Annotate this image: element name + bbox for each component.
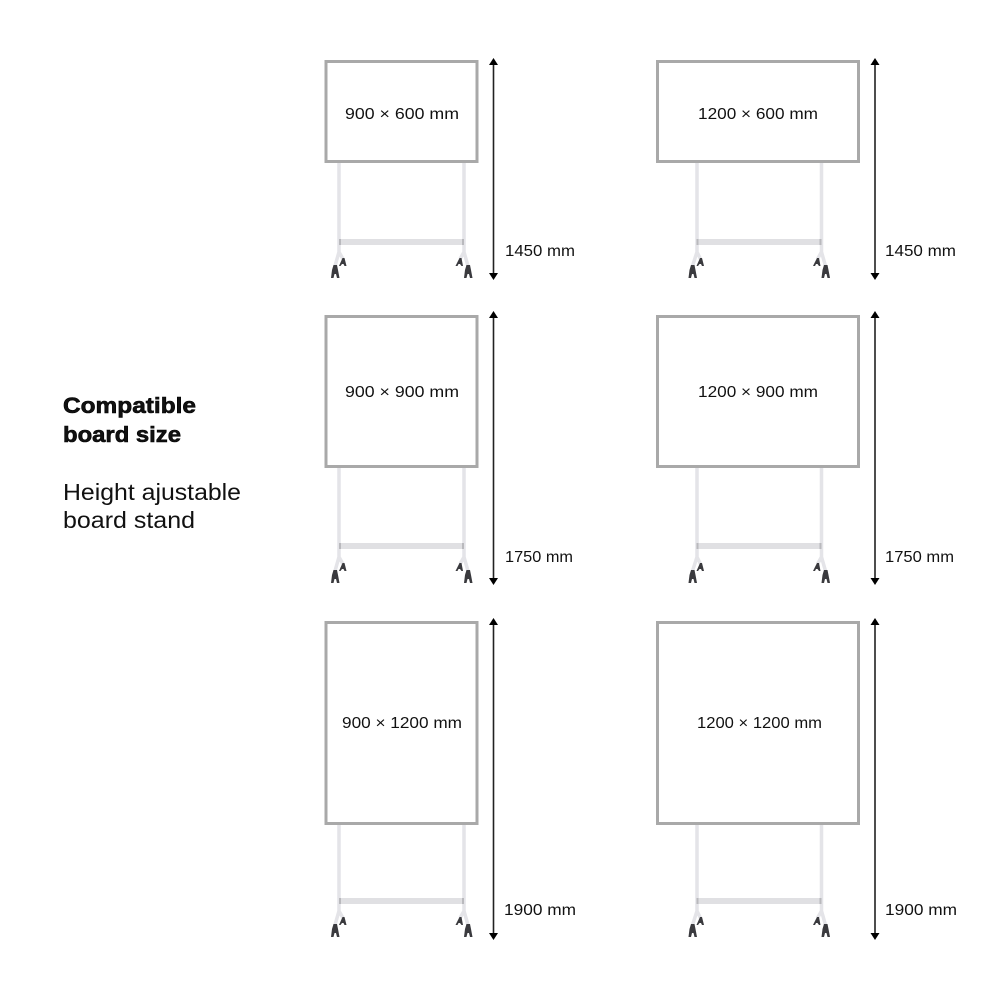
text block: height adjustable stand: Height ajustable <box>63 479 241 505</box>
stand: 900 x 600 <box>331 162 472 278</box>
arrow: 1750 mm height <box>870 311 954 585</box>
stand: 1200 x 600 <box>688 162 830 278</box>
board: 900 x 900: 900 × 900 mm <box>345 384 459 401</box>
arrow: 1750 mm height: 1750 mm <box>885 549 954 566</box>
arrow: 1450 mm height <box>489 58 575 280</box>
board: 1200 x 1200: 1200 × 1200 mm <box>697 715 822 732</box>
heading: compatible board size: board size <box>63 422 181 447</box>
stand: 900 x 900 <box>331 467 472 583</box>
board: 1200 x 600: 1200 × 600 mm <box>698 106 818 123</box>
text block: height adjustable stand: board stand <box>63 507 195 533</box>
board: 1200 x 900: 1200 × 900 mm <box>698 384 818 401</box>
arrow: 1450 mm height <box>870 58 956 280</box>
board: 900 x 600: 900 × 600 mm <box>345 106 459 123</box>
arrow: 1750 mm height <box>489 311 573 585</box>
stand: 1200 x 1200 <box>688 824 830 937</box>
arrow: 1900 mm height: 1900 mm <box>885 902 957 919</box>
board: 900 x 900 <box>326 316 477 466</box>
stand: 1200 x 900 <box>688 467 830 583</box>
arrow: 1900 mm height <box>870 618 957 940</box>
board: 900 x 600 <box>326 62 477 162</box>
arrow: 1900 mm height <box>489 618 576 940</box>
board: 900 x 1200: 900 × 1200 mm <box>342 715 462 732</box>
arrow: 1450 mm height: 1450 mm <box>505 243 575 260</box>
arrow: 1450 mm height: 1450 mm <box>885 243 956 260</box>
heading: compatible board size <box>63 393 196 447</box>
board: 1200 x 900 <box>658 316 858 466</box>
board: 900 x 1200 <box>326 622 477 824</box>
stand: 900 x 1200 <box>331 824 472 937</box>
arrow: 1750 mm height: 1750 mm <box>505 549 573 566</box>
arrow: 1900 mm height: 1900 mm <box>504 902 576 919</box>
text block: height adjustable stand <box>63 479 241 533</box>
board: 1200 x 1200 <box>658 622 858 824</box>
board: 1200 x 600 <box>658 62 858 162</box>
heading: compatible board size: Compatible <box>63 393 196 418</box>
